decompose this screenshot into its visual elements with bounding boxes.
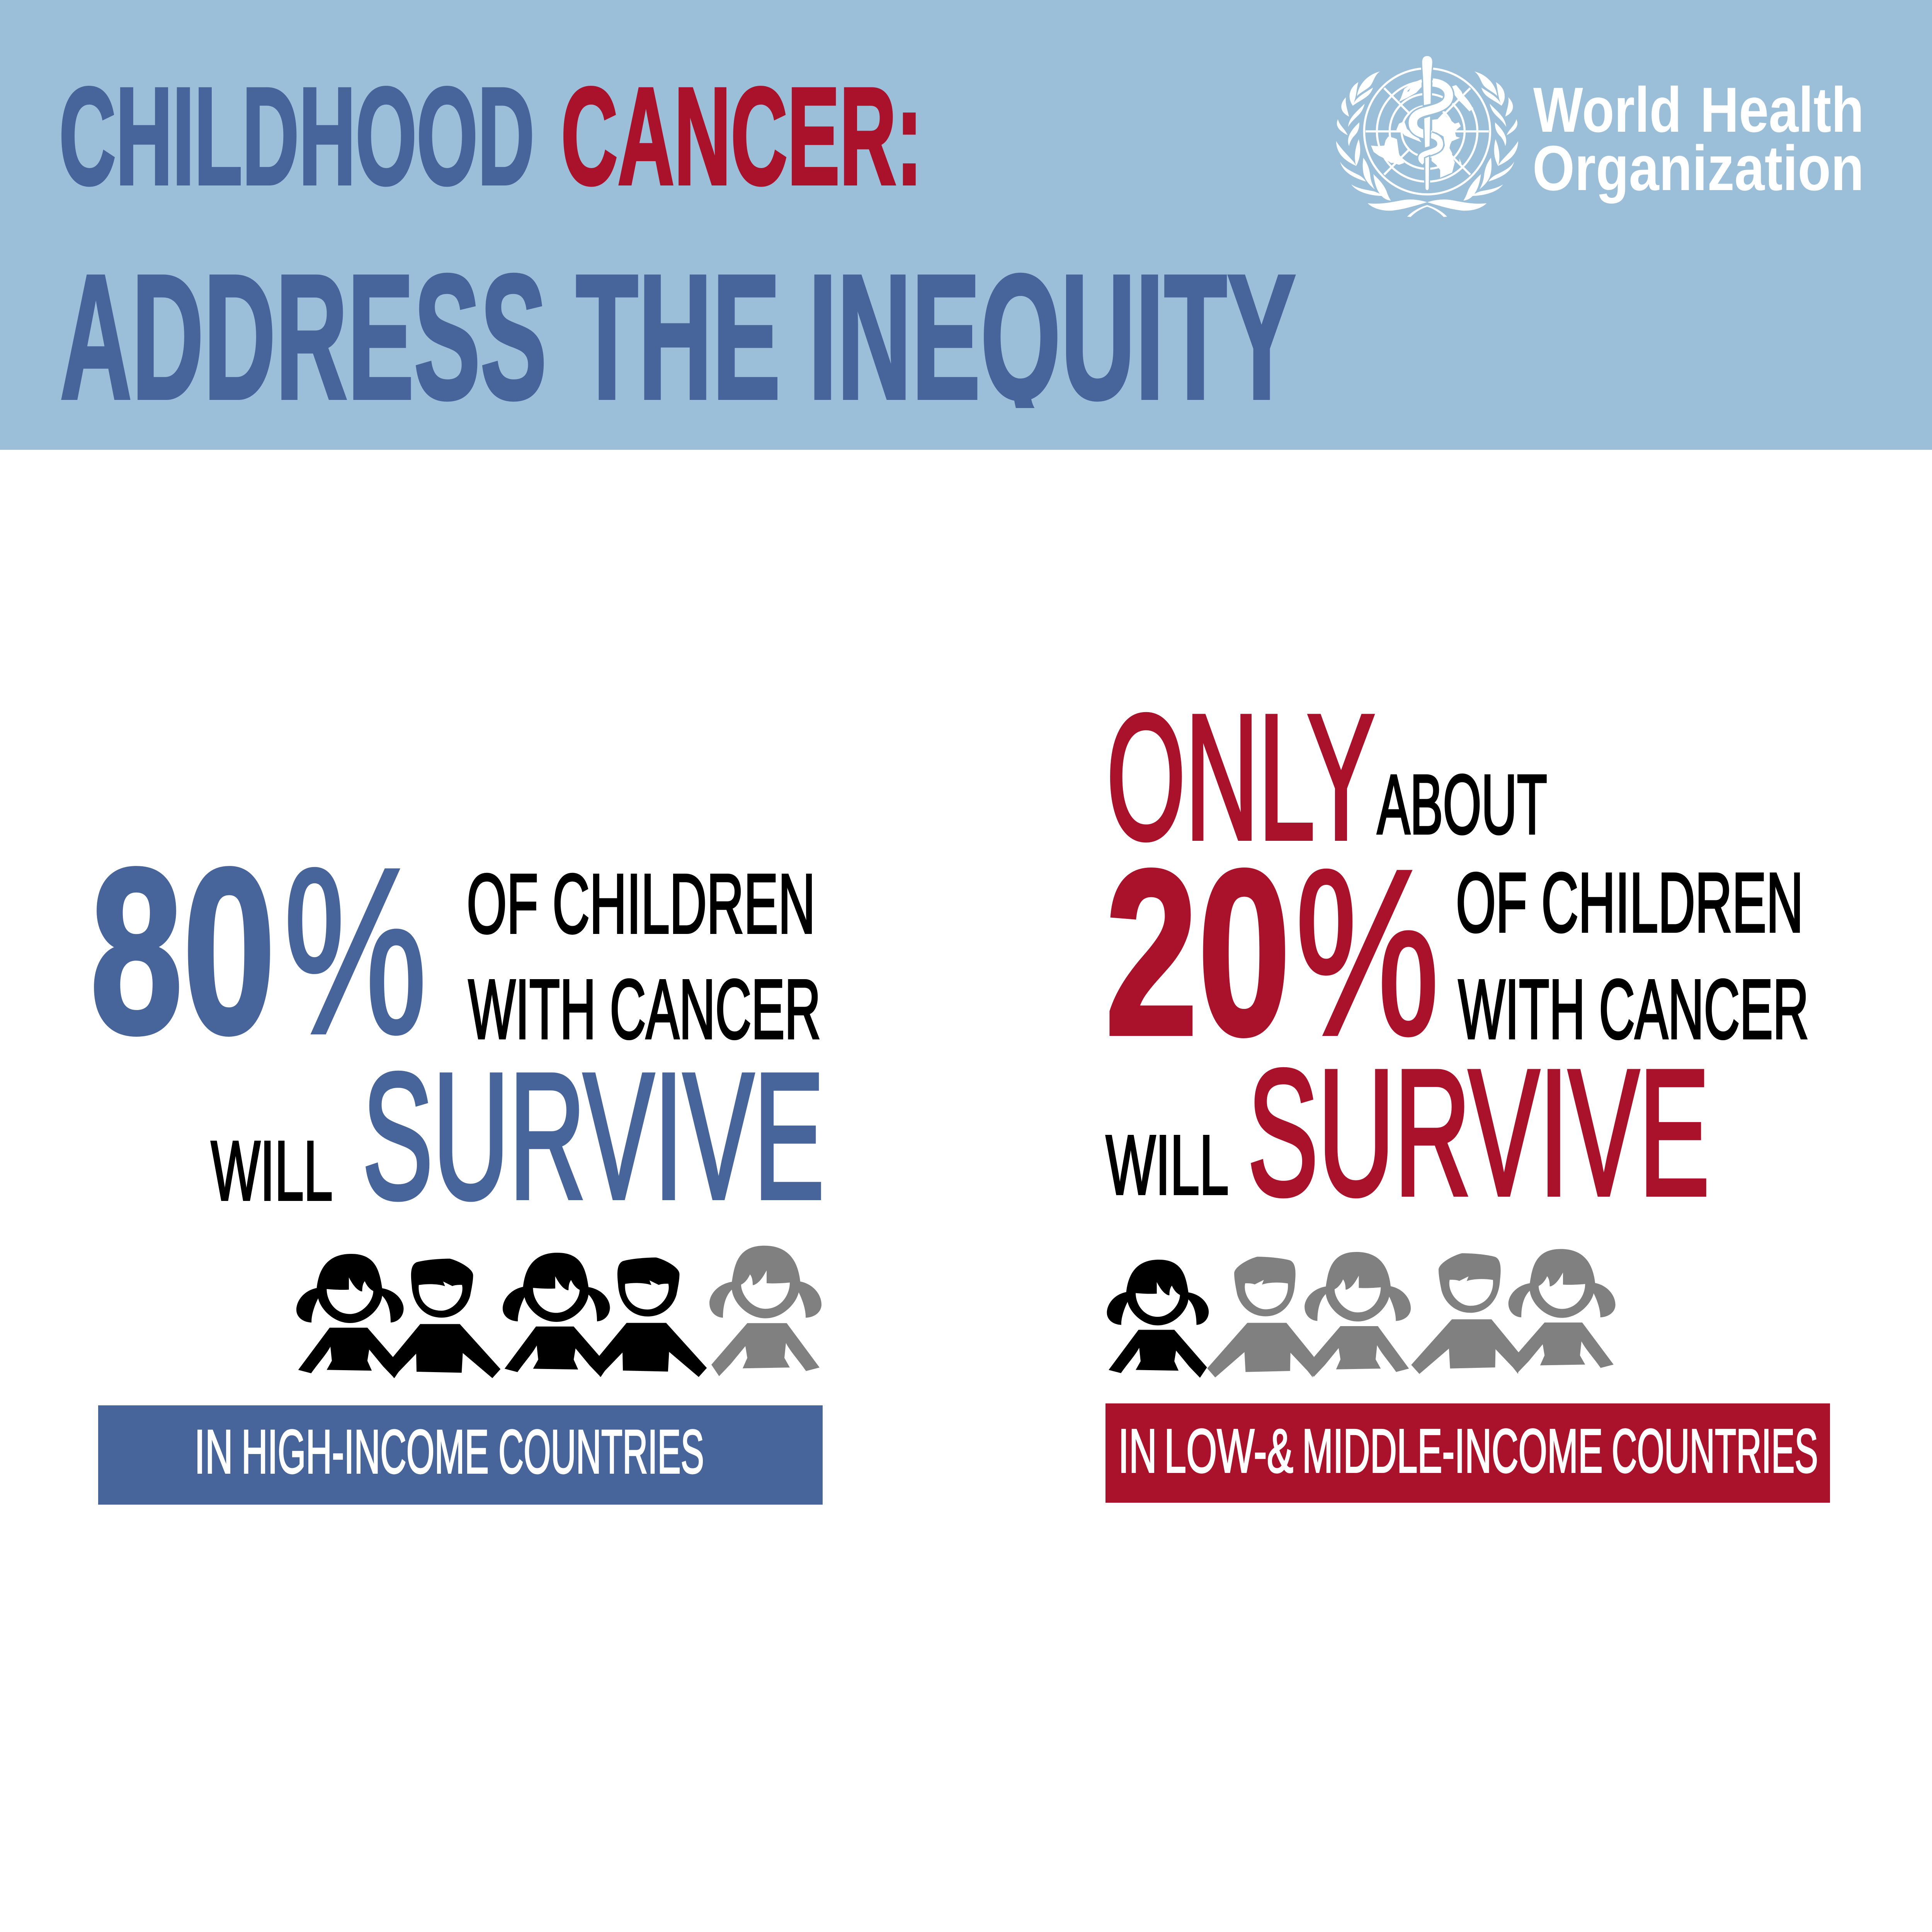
label bar: in low and middle-income countries: MIDDLE-INCOME (1302, 1416, 1603, 1485)
title: address the inequity (61, 273, 1296, 408)
text: will: WILL (1106, 1118, 1229, 1212)
logo wordmark (1532, 74, 1864, 204)
icon row: 4 of 5 children in black (296, 1246, 821, 1378)
label bar: in low and middle-income countries: IN (1118, 1416, 1157, 1485)
label bar: in low and middle-income countries (1105, 1403, 1830, 1503)
title: address the inequity: ADDRESS (60, 238, 547, 436)
stat: 80 percent: 80 (90, 820, 276, 1083)
panel: high-income countries (90, 820, 824, 1505)
label bar: in low and middle-income countries: LOW-& (1164, 1416, 1293, 1485)
stat: 20 percent: % (1295, 821, 1439, 1084)
logo wordmark: Health (1700, 74, 1864, 145)
label bar: in high-income countries: COUNTRIES (498, 1417, 704, 1486)
label bar: in high-income countries (98, 1405, 823, 1505)
title: childhood cancer: CANCER: (561, 59, 922, 213)
text: survive: SURVIVE (362, 1036, 824, 1236)
label bar: in high-income countries: HIGH-INCOME (242, 1417, 489, 1486)
label bar: in high-income countries: IN (194, 1417, 233, 1486)
title: address the inequity: THE (576, 238, 781, 436)
header band (0, 0, 1932, 450)
text: of children with cancer: WITH CANCER (468, 963, 821, 1056)
text: only: ONLY (1107, 678, 1375, 876)
logo wordmark: Organization (1532, 133, 1864, 204)
WHO logo (1336, 56, 1864, 217)
text: of children with cancer (1456, 856, 1809, 1056)
stat: 80 percent: % (284, 820, 427, 1083)
title: childhood cancer: CHILDHOOD (59, 59, 534, 213)
logo wordmark: World (1533, 74, 1682, 145)
title: address the inequity: INEQUITY (808, 238, 1296, 436)
panel: low- and middle-income countries (1105, 678, 1830, 1503)
text: of children with cancer (467, 857, 821, 1056)
icon: WHO emblem (1336, 56, 1518, 217)
text: about: ABOUT (1377, 758, 1547, 852)
stat: 20 percent: 20 (1105, 821, 1291, 1084)
icon row: 1 of 5 children in black (1107, 1249, 1616, 1378)
text: will: WILL (211, 1124, 333, 1218)
text: of children with cancer: OF CHILDREN (467, 857, 815, 951)
